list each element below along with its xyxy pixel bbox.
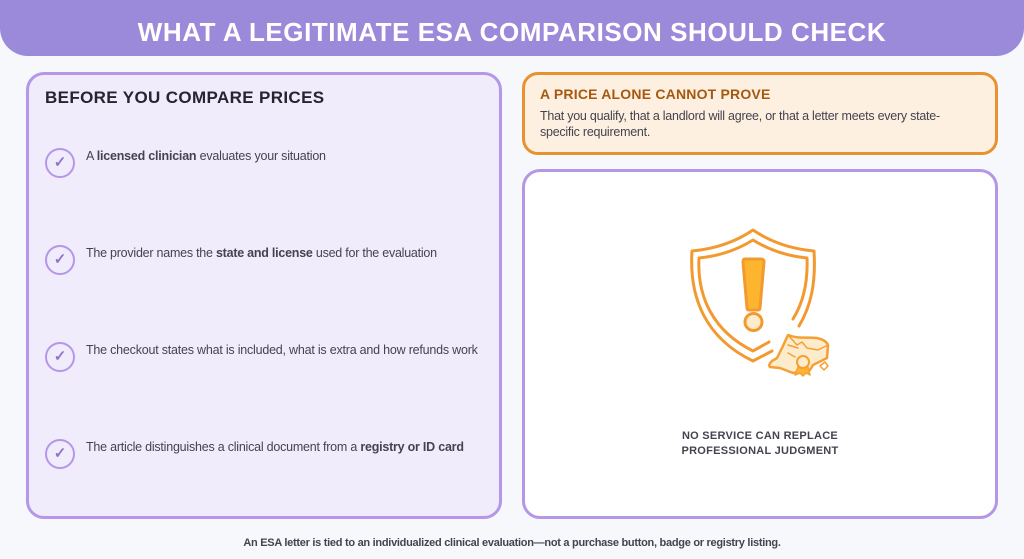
panel: illustration card [522,169,998,519]
title banner: WHAT A LEGITIMATE ESA COMPARISON SHOULD CHECK [138,17,886,47]
callout text: specific requirement. [540,125,650,139]
icon: check 2 [45,245,75,275]
icon: check 1 [45,148,75,178]
callout text [540,109,940,139]
heading: a price alone cannot prove: A PRICE ALONE CANNOT PROVE [540,86,771,102]
item 2 text: The provider names the state and license used for the evaluation [86,246,437,260]
item 4 text: The article distinguishes a clinical document from a registry or ID card [86,440,464,454]
icon: shield with exclamation and certificate [690,228,830,377]
heading: before you compare prices: BEFORE YOU COMPARE PRICES [45,88,324,107]
icon: check 2: ✓ [54,251,66,268]
callout text: That you qualify, that a landlord will agree, or that a letter meets every state- [540,109,940,123]
item 3 text: The checkout states what is included, what is extra and how refunds work [86,343,478,357]
icon: check 3: ✓ [54,348,66,365]
icon: check 1: ✓ [54,154,66,171]
illustration caption [681,430,839,457]
panel: before you compare prices [26,72,502,519]
panel: a price alone cannot prove [522,72,998,155]
footer note: An ESA letter is tied to an individualized clinical evaluation—not a purchase button, badge or registry listing. [243,537,781,549]
icon: check 4: ✓ [54,445,66,462]
icon: check 3 [45,342,75,372]
item 1 text: A licensed clinician evaluates your situation [86,149,326,163]
illustration caption: PROFESSIONAL JUDGMENT [681,445,839,457]
illustration caption: NO SERVICE CAN REPLACE [682,430,838,442]
icon: check 4 [45,439,75,469]
title banner [0,0,1024,56]
